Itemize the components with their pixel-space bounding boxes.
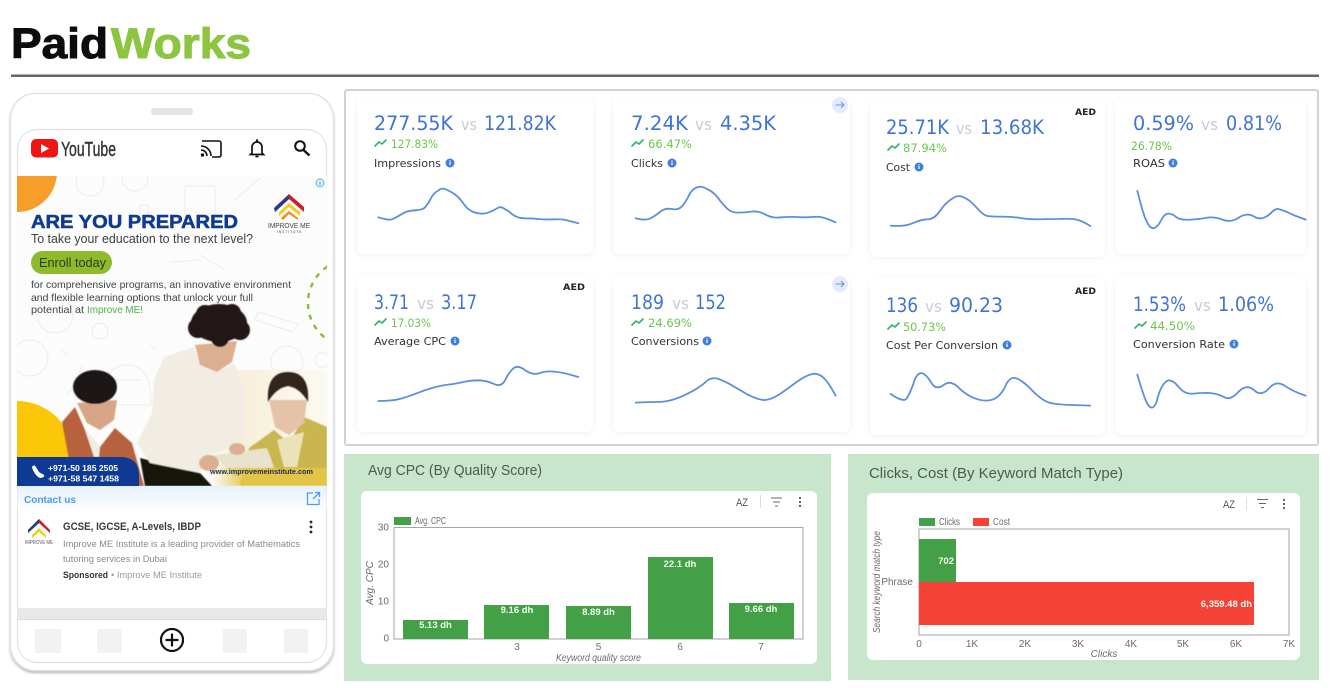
phone number strip: +971-58 547 1458 — [48, 474, 119, 484]
icon: Improve ME logo: IMPROVE ME — [268, 223, 310, 230]
chart toolbar icons: AZ — [736, 497, 748, 509]
card: Average CPC: Average CPC — [374, 336, 446, 348]
icon: arrow button — [832, 276, 848, 292]
contact us bar: Contact us — [24, 494, 76, 506]
card: ROAS: 26.78% — [1131, 139, 1172, 153]
card: ROAS: ROAS — [1133, 158, 1165, 170]
icon: ad info — [316, 179, 324, 187]
card: Conversions — [613, 275, 850, 432]
ad headline: ARE YOU PREPARED — [31, 212, 238, 232]
card: Cost Per Conversion: Cost Per Conversion — [886, 340, 998, 352]
illustration: students and tutor — [62, 304, 327, 486]
horizontal bar chart: 6K — [1230, 639, 1242, 650]
bar chart: 8.89 dh — [582, 607, 615, 618]
logo: PaidWorks: Paid — [11, 20, 108, 68]
chart toolbar icons — [1223, 497, 1285, 511]
card: Clicks: 7.24K — [631, 112, 689, 135]
chart toolbar icons — [736, 495, 801, 509]
card: Cost Per Conversion: AED — [1075, 287, 1096, 297]
bar chart: Avg. CPC — [365, 560, 376, 606]
horizontal bar chart: 7K — [1283, 639, 1295, 650]
card: Cost Per Conversion — [870, 278, 1105, 435]
card: ROAS: 0.81% — [1226, 112, 1282, 135]
card: Clicks: vs — [695, 115, 712, 134]
icon: Improve ME logo — [268, 194, 310, 234]
icon: Improve ME logo: INSTITUTE — [277, 230, 302, 234]
horizontal bar chart — [872, 529, 1295, 660]
contact us bar — [18, 486, 326, 509]
YouTube header bar — [31, 139, 310, 161]
ad listing card: GCSE, IGCSE, A-Levels, IBDP — [63, 521, 201, 533]
card: Conversion Rate: Conversion Rate — [1133, 339, 1225, 351]
card: Cost: 25.71K — [886, 116, 950, 139]
bar chart — [365, 522, 803, 664]
icon: advertiser logo — [25, 519, 54, 546]
card: Average CPC: 17.03% — [391, 316, 431, 330]
card: Impressions: Impressions — [374, 158, 441, 170]
card: Impressions: vs — [461, 115, 477, 134]
horizontal bar chart: 4K — [1125, 639, 1137, 650]
card: Cost Per Conversion: vs — [925, 297, 942, 316]
legend: Cost — [993, 517, 1010, 528]
card: Cost Per Conversion: 90.23 — [949, 294, 1003, 317]
card: Conversion Rate: vs — [1194, 296, 1211, 315]
card: Cost Per Conversion: 136 — [886, 294, 918, 317]
icon: advertiser logo: IMPROVE ME — [25, 540, 54, 546]
ad listing card: • Improve ME Institute — [111, 570, 202, 581]
card: Conversion Rate: 1.53% — [1133, 293, 1186, 316]
ad description: for comprehensive programs, an innovative environment — [31, 279, 291, 291]
bar chart: 7 — [758, 642, 764, 653]
card: Impressions: 277.55K — [374, 112, 454, 135]
ad listing card: tutoring services in Dubai — [63, 554, 167, 565]
card: Average CPC: 3.71 — [374, 291, 409, 314]
ad subheading: To take your education to the next level? — [31, 231, 253, 246]
card: Impressions: 127.83% — [391, 137, 438, 151]
orange corner shape — [17, 176, 57, 212]
horizontal bar chart: 6,359.48 dh — [1201, 599, 1252, 610]
card: Average CPC: 3.17 — [441, 291, 477, 314]
card: Impressions — [357, 97, 593, 254]
card: ROAS — [1115, 97, 1306, 254]
bar chart: 3 — [514, 642, 520, 653]
ad description: and flexible learning options that unlock your full — [31, 292, 253, 304]
enroll button: Enroll today — [39, 255, 106, 270]
bar chart: Keyword quality score — [556, 653, 641, 664]
bar chart: 0 — [383, 634, 389, 644]
card: Clicks — [613, 97, 850, 254]
card: ROAS: vs — [1201, 115, 1218, 134]
card: Cost: vs — [956, 119, 972, 138]
bar chart: 5.13 dh — [419, 620, 452, 631]
bar chart: 22.1 dh — [664, 559, 697, 570]
horizontal bar chart: 1K — [966, 639, 978, 650]
heading: Avg CPC (By Quality Score) — [368, 462, 542, 479]
horizontal bar chart: Clicks — [1091, 649, 1117, 660]
card: Conversion Rate: 44.50% — [1150, 319, 1195, 333]
card: Clicks: 66.47% — [648, 137, 692, 151]
horizontal bar chart: Search keyword match type — [872, 531, 883, 633]
icon: arrow button — [832, 97, 848, 113]
legend: Avg. CPC — [415, 516, 446, 527]
ad description — [31, 279, 291, 316]
ad listing card: Improve ME Institute is a leading provider of Mathematics — [63, 539, 300, 550]
horizontal bar chart: Phrase — [881, 577, 913, 588]
legend — [394, 516, 446, 527]
green dashed arc — [306, 266, 327, 338]
card: Cost: Cost — [886, 162, 910, 174]
phone number strip: +971-50 185 2505 — [48, 463, 118, 473]
ad listing card — [25, 519, 312, 581]
card: Cost: AED — [1075, 108, 1096, 118]
card: Clicks: Clicks — [631, 158, 663, 170]
panel: KPI scorecards — [345, 90, 1318, 445]
card: Conversions: 189 — [631, 291, 664, 314]
legend: Clicks — [939, 517, 960, 528]
horizontal bar chart: 5K — [1177, 639, 1189, 650]
card: Average CPC: vs — [417, 294, 434, 313]
card: Cost: 87.94% — [903, 141, 947, 155]
card: Conversions: 152 — [695, 291, 726, 314]
card: Cost: 13.68K — [980, 116, 1045, 139]
card: Conversion Rate — [1115, 275, 1306, 435]
card: Cost — [870, 100, 1105, 257]
bar chart: 9.66 dh — [745, 604, 778, 615]
card: Cost Per Conversion: 50.73% — [903, 320, 946, 334]
YouTube header bar: YouTube — [61, 139, 116, 161]
card: Impressions: 121.82K — [484, 112, 557, 135]
card: Average CPC — [357, 275, 593, 432]
bar chart: 9.16 dh — [501, 605, 534, 616]
horizontal bar chart: 2K — [1019, 639, 1031, 650]
website address: www.improvemeinstitute.com — [209, 467, 313, 476]
bottom navigation bar — [35, 629, 308, 653]
card: Clicks: 4.35K — [720, 112, 777, 135]
ad description: potential at — [31, 304, 84, 316]
heading: Clicks, Cost (By Keyword Match Type) — [869, 465, 1123, 482]
yellow circle shape — [17, 401, 70, 457]
horizontal bar chart: 702 — [938, 556, 954, 567]
ad creative image — [17, 176, 327, 486]
logo: PaidWorks: Works — [111, 20, 251, 68]
horizontal bar chart: 0 — [916, 639, 922, 650]
card: Conversion Rate: 1.06% — [1218, 293, 1274, 316]
logo: PaidWorks — [11, 20, 251, 68]
legend — [919, 517, 1010, 528]
panel: phone mockup with YouTube ad — [8, 92, 336, 674]
enroll button — [31, 251, 112, 274]
panel: Avg CPC by quality score — [344, 454, 831, 681]
phone number strip — [17, 457, 139, 486]
horizontal bar chart: 3K — [1072, 639, 1084, 650]
card: Conversions: vs — [672, 294, 689, 313]
bar chart: 10 — [378, 596, 389, 608]
chart toolbar icons: AZ — [1223, 499, 1235, 511]
bar chart: 30 — [378, 522, 389, 534]
ad listing card: Sponsored — [63, 570, 108, 581]
bar chart: 6 — [677, 642, 683, 653]
ad description: Improve ME! — [87, 304, 143, 316]
bar chart: 5 — [596, 642, 602, 653]
card: Average CPC: AED — [563, 283, 585, 293]
card: Conversions: 24.69% — [648, 316, 692, 330]
card: ROAS: 0.59% — [1133, 112, 1194, 135]
bar chart: 20 — [378, 560, 389, 570]
panel: clicks and cost by keyword match type — [848, 454, 1319, 680]
card: Conversions: Conversions — [631, 336, 699, 348]
